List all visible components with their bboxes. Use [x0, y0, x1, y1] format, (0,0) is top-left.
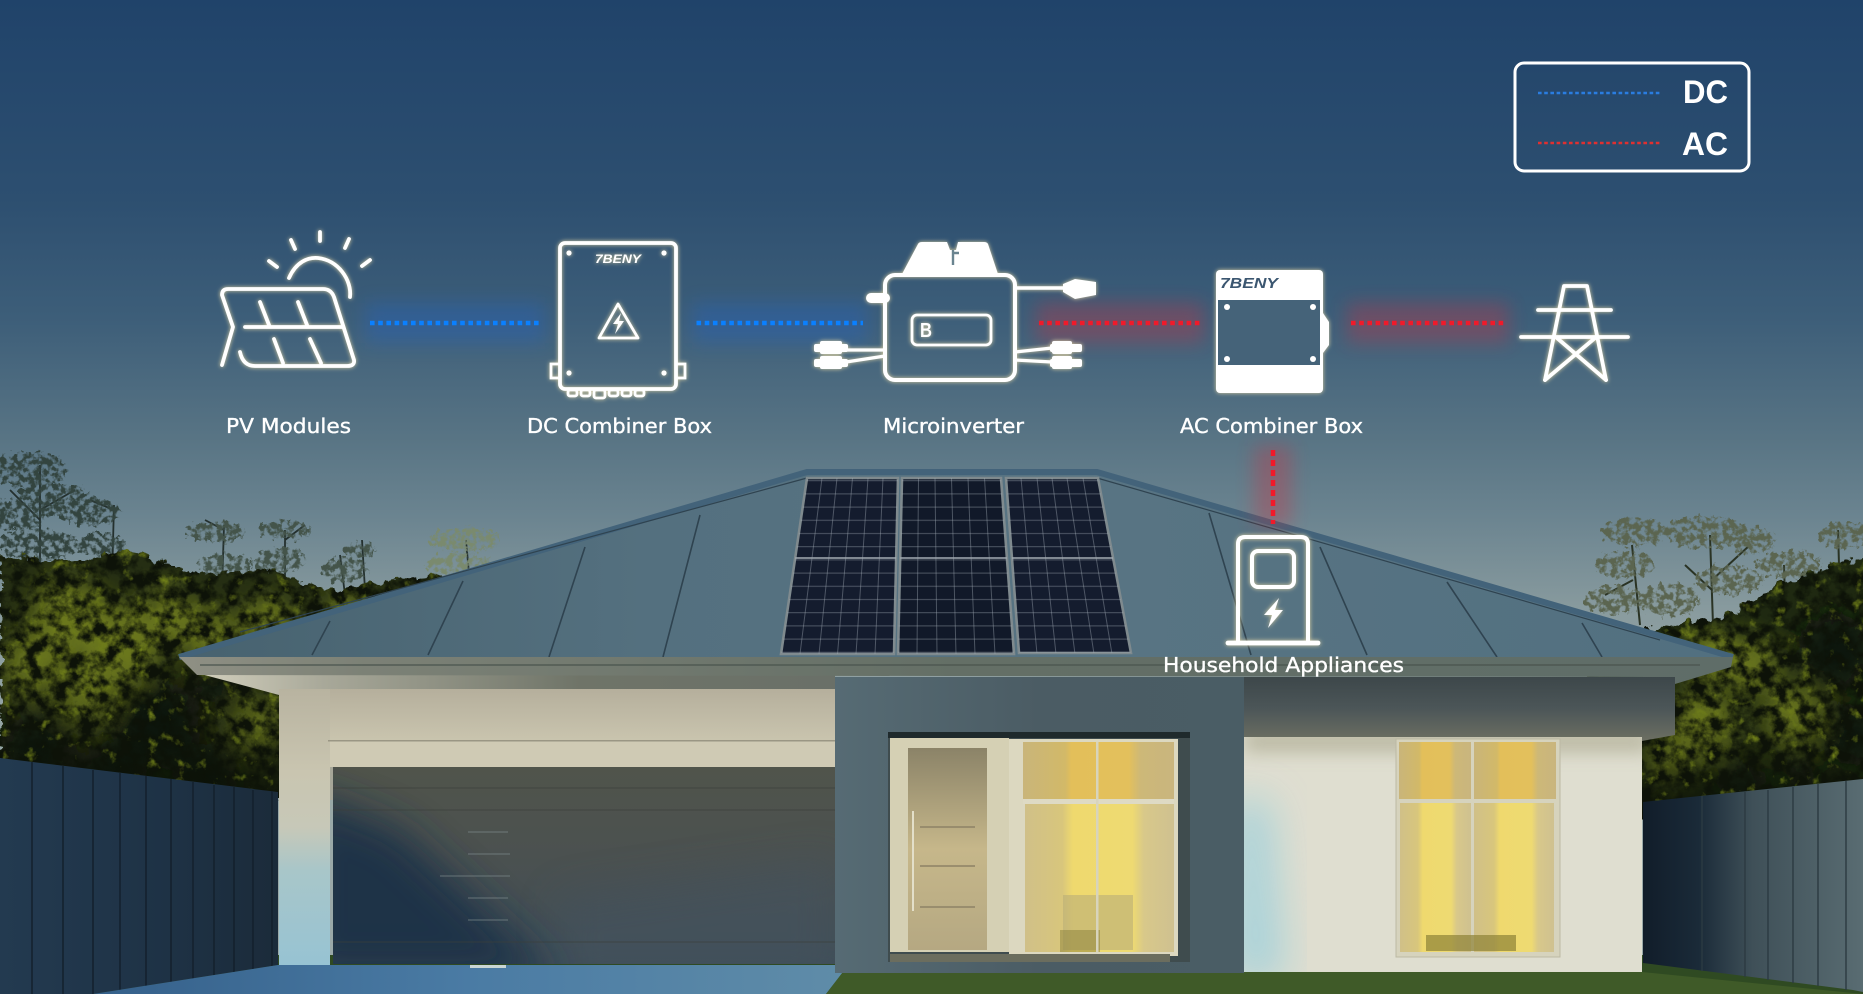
AC connection: AC combiner to grid: [1347, 303, 1509, 343]
forest mass right: [1587, 556, 1863, 820]
legend DC: DC: [1683, 74, 1728, 110]
soffit and wall left: [197, 673, 835, 965]
logo: 7BENY: [1220, 275, 1280, 292]
ground: [0, 955, 1863, 994]
icon: household appliances: [1228, 537, 1318, 643]
door: [908, 748, 987, 950]
icon: DC combiner box: [551, 243, 685, 398]
AC connection: microinverter to AC combiner: [1036, 303, 1204, 343]
trees right: [1570, 516, 1863, 830]
upper band right: [1244, 677, 1675, 741]
entry alcove: [888, 732, 1190, 962]
solar panels: [770, 478, 1140, 658]
driveway: [93, 965, 843, 994]
icon: PV modules: [222, 232, 370, 366]
tall pines right: [1585, 516, 1863, 625]
forest mass left: [0, 549, 442, 800]
left fence: [0, 758, 278, 994]
label: Microinverter: Microinverter: [883, 414, 1025, 438]
entry pillar: [835, 677, 1244, 973]
legend AC: AC: [1682, 126, 1728, 162]
label: AC Combiner Box: AC Combiner Box: [1180, 414, 1363, 438]
fascia eave: [179, 657, 1733, 684]
logo: 7BENY: [595, 252, 642, 266]
right fence: [1643, 779, 1863, 992]
garage door: [333, 767, 835, 968]
trees left: [0, 452, 501, 816]
white wall: [1244, 737, 1642, 972]
icon: microinverter: [814, 242, 1096, 380]
mounting bracket: [902, 242, 998, 274]
house: [179, 472, 1733, 980]
legend: [1515, 63, 1749, 171]
roof: [179, 472, 1733, 657]
icon: microinverter: B: [920, 320, 932, 342]
grass: [826, 972, 1863, 994]
icon: AC combiner box: [1216, 270, 1329, 393]
label: DC Combiner Box: DC Combiner Box: [527, 414, 712, 438]
side window: [1396, 739, 1560, 957]
tall pines left: [0, 452, 501, 595]
warning triangle: [599, 304, 638, 338]
DC connection: PV to DC combiner: [365, 303, 545, 343]
icon: grid tower: [1521, 286, 1628, 380]
AC connection: AC combiner to household: [1254, 446, 1292, 526]
front window: [1023, 742, 1174, 952]
label: PV Modules: PV Modules: [226, 414, 351, 438]
label: Household Appliances: Household Appliances: [1163, 653, 1404, 677]
DC connection: DC combiner to microinverter: [692, 303, 868, 343]
